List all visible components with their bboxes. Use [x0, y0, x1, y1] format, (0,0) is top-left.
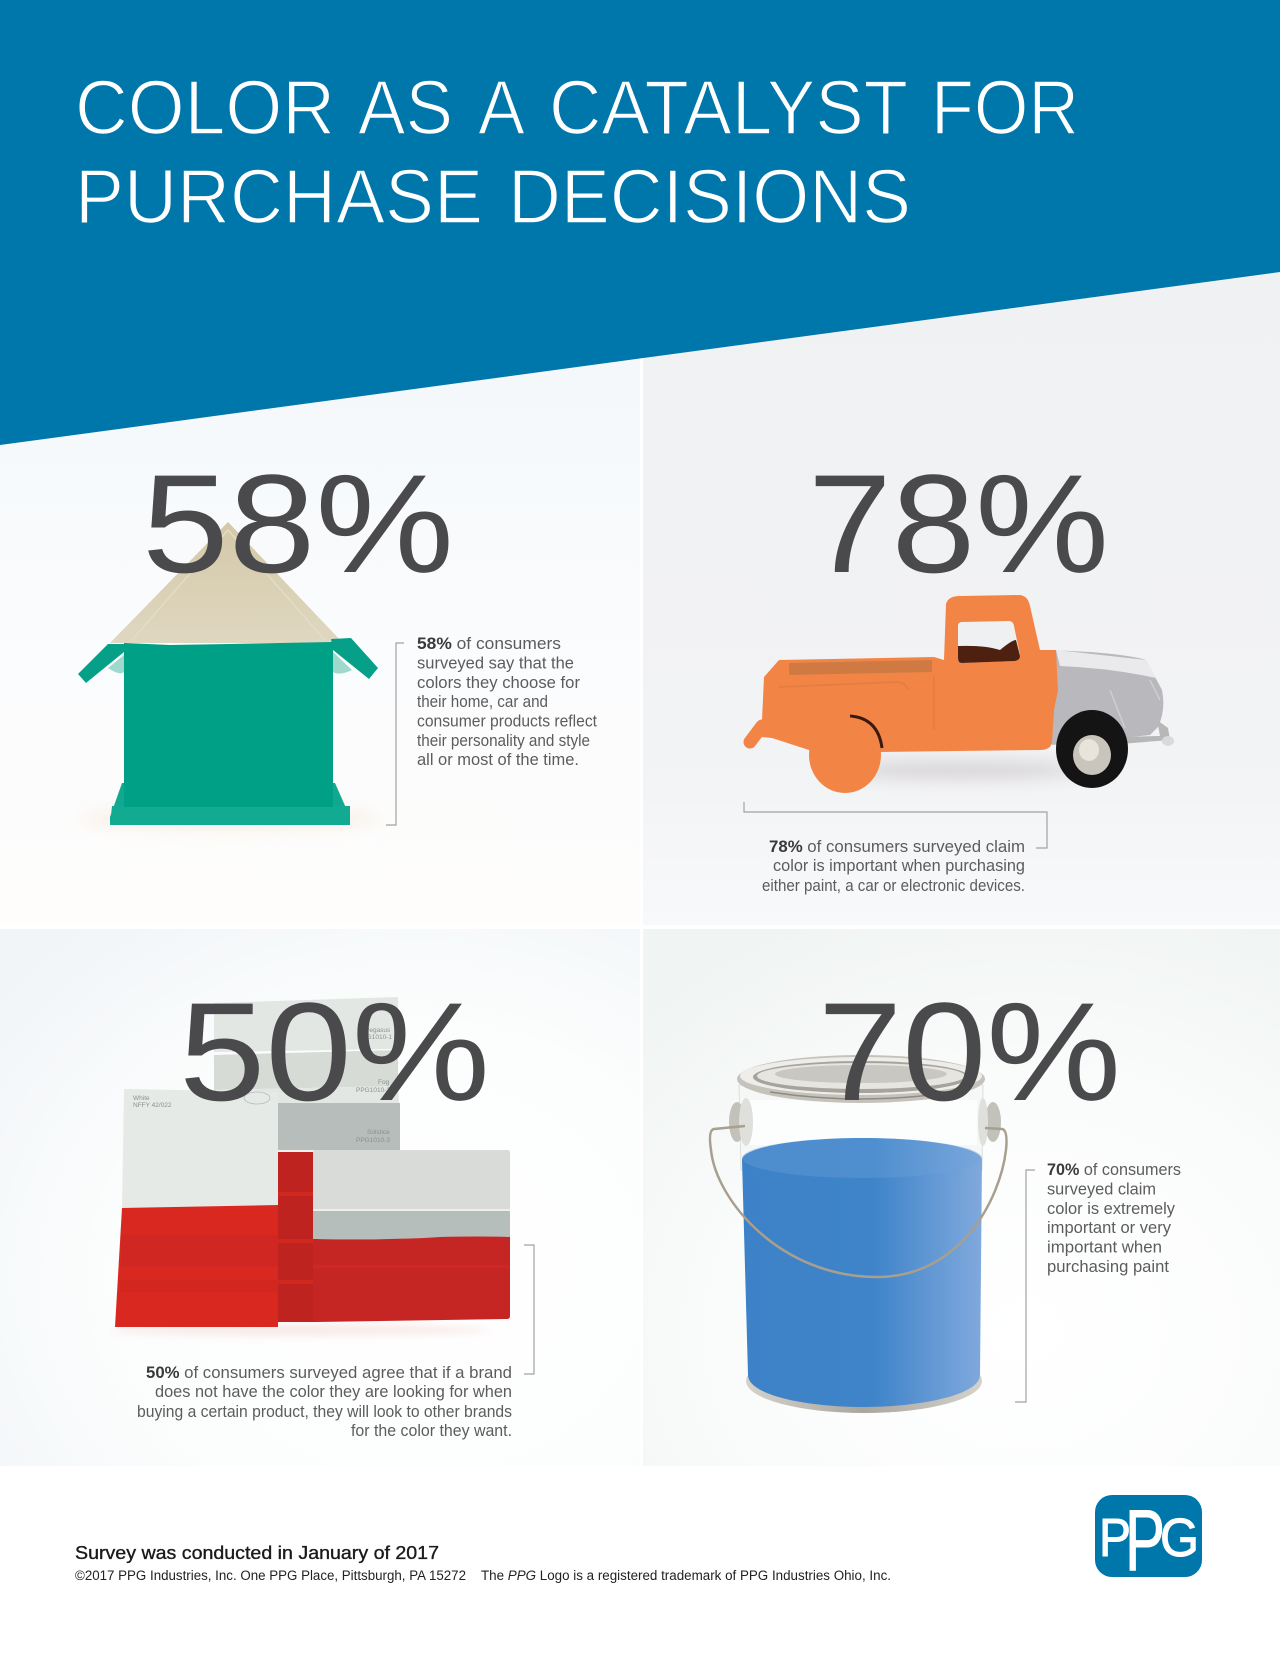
text: 58% description: 58% of consumers [417, 635, 561, 653]
text: 50% description: does not have the color they are looking for when [155, 1383, 512, 1401]
panel: 50% paint swatches [0, 929, 640, 1466]
icon: paint swatch cards: NFFY 42/022 [133, 1102, 172, 1109]
text: 50% description: for the color they want. [351, 1422, 512, 1440]
logo: PPG: P [1125, 1493, 1165, 1589]
footer copyright: The PPG Logo is a registered trademark of PPG Industries Ohio, Inc. [481, 1568, 891, 1583]
cab window [958, 621, 1020, 663]
rear fender wheel [809, 717, 881, 793]
text: 50% description [137, 1364, 512, 1440]
grey hood [1050, 650, 1163, 745]
back card [214, 997, 398, 1052]
back card label text: Pegasus [365, 1027, 391, 1034]
text: 58% description [417, 635, 597, 769]
footer copyright [75, 1568, 891, 1583]
bracket line [1015, 1170, 1035, 1402]
wheel arch shadow [850, 716, 882, 748]
text: 58% description: all or most of the time. [417, 751, 579, 769]
bottom rim [746, 1349, 982, 1413]
logo: PPG: G [1160, 1508, 1199, 1568]
icon: paint swatch cards: Fog [378, 1079, 390, 1086]
footer copyright: ©2017 PPG Industries, Inc. One PPG Place, Pittsburgh, PA 15272 [75, 1568, 466, 1583]
blue paint [742, 1138, 982, 1407]
rear bumper [750, 726, 762, 742]
text: 58% description: consumer products reflect [417, 712, 597, 730]
big stat: 58%: 58% [142, 445, 454, 602]
door seam [933, 676, 935, 730]
text: 78% description: either paint, a car or electronic devices. [762, 877, 1025, 895]
text: 70% description [1047, 1161, 1181, 1276]
text: 58% description: surveyed say that the [417, 654, 574, 672]
bracket line [524, 1245, 534, 1374]
big stat: 78%: 78% [808, 445, 1109, 602]
big stat: 70%: 70% [818, 973, 1121, 1130]
icon: paint swatch cards: PPG1010-1 [358, 1034, 392, 1041]
footer note: Survey was conducted in January of 2017 [75, 1543, 439, 1563]
truck bed edge [779, 682, 908, 690]
panel: 58% house [0, 300, 640, 925]
icon: blue paint can [710, 1055, 1006, 1413]
title: PURCHASE [75, 154, 483, 240]
icon: orange toy truck [750, 595, 1174, 793]
title: A [478, 65, 526, 151]
title: CATALYST [549, 65, 908, 151]
icon: painted wooden house [78, 522, 380, 828]
header band [0, 0, 1280, 445]
title: AS [358, 65, 453, 151]
right card [313, 1150, 510, 1210]
text: 70% description: 70% of consumers [1047, 1161, 1181, 1179]
title: FOR [931, 65, 1079, 151]
text: 70% description: purchasing paint [1047, 1258, 1169, 1276]
bracket line [386, 643, 404, 825]
truck bed interior [789, 660, 932, 675]
text: 50% description: 50% of consumers surveyed agree that if a brand [146, 1364, 512, 1382]
text: 78% description [762, 838, 1025, 895]
text: 70% description: important when [1047, 1238, 1162, 1256]
can rim [737, 1055, 985, 1103]
icon: paint swatch cards: PPG1010-2 [356, 1087, 390, 1094]
middle card [278, 1103, 400, 1150]
logo: PPG [1095, 1493, 1202, 1589]
title: COLOR [75, 65, 335, 151]
title: DECISIONS [508, 154, 911, 240]
text: 58% description: colors they choose for [417, 674, 581, 692]
icon: paint swatch cards: White [133, 1095, 150, 1102]
icon: paint swatch cards [110, 997, 510, 1336]
glass can body [739, 1085, 983, 1170]
side ears [729, 1098, 1001, 1146]
panel: 78% truck [643, 260, 1280, 925]
icon: paint swatch cards: PPG1010-3 [356, 1137, 390, 1144]
chrome bumper [1120, 720, 1170, 744]
text: 78% description: 78% of consumers surveyed claim [769, 838, 1025, 856]
orange body [762, 595, 1058, 752]
front wheel [1056, 710, 1128, 788]
text: 70% description: surveyed claim [1047, 1180, 1156, 1198]
text: 70% description: important or very [1047, 1219, 1172, 1237]
big stat: 50%: 50% [179, 973, 490, 1130]
text: 70% description: color is extremely [1047, 1200, 1176, 1218]
panel: 70% paint can [643, 929, 1280, 1466]
text: 58% description: their home, car and [417, 693, 548, 711]
left card [122, 1089, 278, 1208]
title [75, 65, 1079, 240]
bracket line [744, 802, 1047, 848]
wire handle [710, 1126, 1006, 1277]
logo: PPG: P [1099, 1508, 1131, 1568]
icon: paint swatch cards: Solstice [367, 1129, 390, 1136]
text: 50% description: buying a certain product, they will look to other brands [137, 1403, 512, 1421]
text: 58% description: their personality and style [417, 732, 590, 750]
text: 78% description: color is important when purchasing [773, 857, 1025, 875]
